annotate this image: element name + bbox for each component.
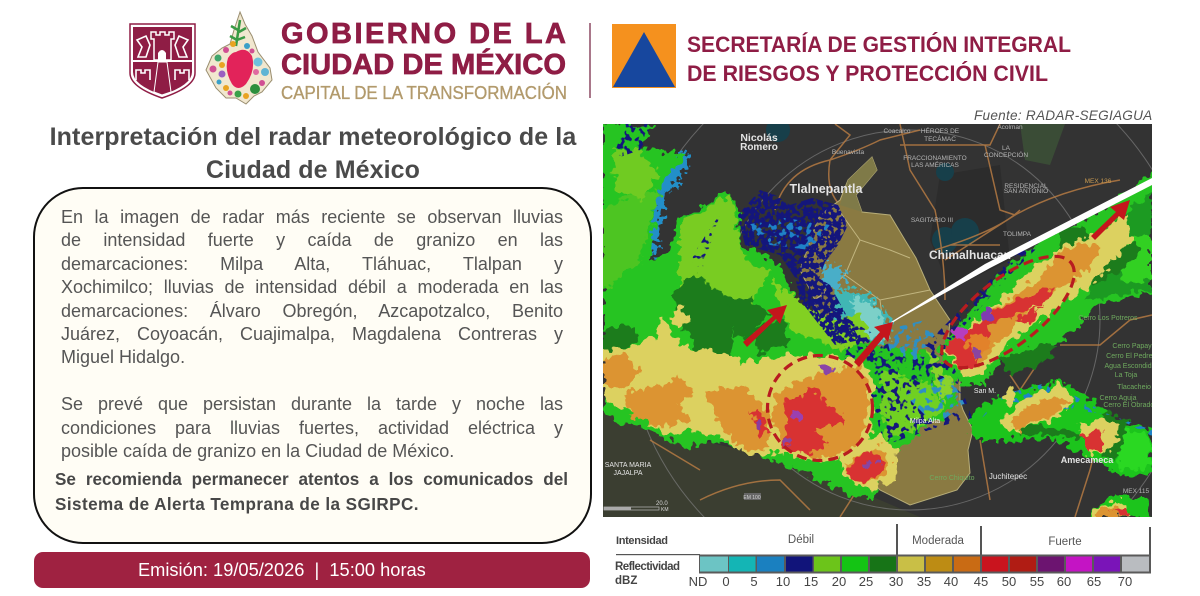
legend reflectivity title: Reflectividad <box>615 561 680 573</box>
legend dBZ values: ND <box>689 574 707 589</box>
legend intensity header: Intensidad <box>616 535 668 547</box>
radar echoes: speckled rain over the city <box>612 124 1152 445</box>
icon: Mexico City map with heart <box>206 12 272 104</box>
map place labels: Juchitepec <box>989 472 1027 481</box>
text block: forecast: Se prevé que persistan durante la tarde y noche las <box>61 394 563 414</box>
map place labels: JAJALPA <box>613 470 643 477</box>
legend dBZ values: 5 <box>750 574 758 589</box>
map place labels: Amecameca <box>1061 455 1114 465</box>
map minor labels: HÉROES DE <box>921 126 960 135</box>
legend reflectivity title: dBZ <box>615 575 637 587</box>
map place labels: Romero <box>740 142 778 153</box>
heading: Secretaría de Gestión Integral: SECRETARÍA DE GESTIÓN INTEGRAL <box>687 32 1071 57</box>
mountain labels: Cerro Aguja <box>1100 395 1137 402</box>
map minor labels: RESIDENCIAL <box>1004 183 1048 190</box>
heading: Gobierno de la Ciudad de México <box>281 18 566 81</box>
map minor labels: SAN ANTONIO <box>1004 188 1048 195</box>
mountain labels: Cerro Chiquito <box>929 475 975 482</box>
map minor labels: Coacalco <box>883 128 911 135</box>
legend dBZ values: 30 <box>889 574 903 589</box>
text block: current observations: demarcaciones: Álvaro Obregón, Azcapotzalco, Benito <box>61 301 563 321</box>
legend dBZ values: 60 <box>1057 574 1071 589</box>
header: government and civil protection logos <box>129 10 1071 105</box>
text block: current observations: Xochimilco; lluvias de intensidad débil a moderada en las <box>61 277 563 297</box>
map minor labels <box>832 124 1150 495</box>
mountain labels: Tlacacheio <box>1117 384 1151 391</box>
map minor labels: Milpa Alta <box>910 418 940 425</box>
text block: forecast: condiciones para lluvias fuertes, actividad eléctrica y <box>61 418 563 438</box>
emission date bar <box>34 552 590 588</box>
dashed ellipse: east storm <box>940 254 1076 370</box>
text block: recommendation: Sistema de Alerta Temprana de la SGIRPC. <box>55 495 419 514</box>
legend dBZ values: 35 <box>917 574 931 589</box>
map base <box>603 124 1152 517</box>
legend dBZ values: 10 <box>776 574 790 589</box>
legend reflectivity title <box>615 561 680 587</box>
mountain labels: Agua Escondida <box>1105 363 1156 370</box>
text block: recommendation: Se recomienda permanecer atentos a los comunicados del <box>55 470 568 489</box>
legend dBZ values: 70 <box>1118 574 1132 589</box>
legend intensity header <box>616 534 1082 548</box>
mountain labels: Cerro El Obrador <box>1103 402 1157 409</box>
dashed circle: southwest storm <box>768 356 872 460</box>
legend dBZ values: 65 <box>1087 574 1101 589</box>
text block: current observations <box>61 207 563 367</box>
CDMX northern olive tip <box>840 157 877 212</box>
heading: Secretaría de Gestión Integral <box>687 32 1071 86</box>
map place labels: Nicolás <box>740 132 778 144</box>
text block: current observations: Juárez, Coyoacán, Cuajimalpa, Magdalena Contreras y <box>61 324 563 344</box>
heading: Gobierno de la Ciudad de México: CIUDAD DE MÉXICO <box>281 47 566 81</box>
map minor labels: LAS AMÉRICAS <box>911 160 960 169</box>
road network <box>650 124 1152 517</box>
arrow: center storm motion <box>854 322 893 367</box>
text block: current observations: Miguel Hidalgo. <box>61 347 185 367</box>
arrow: west storm motion <box>743 305 787 347</box>
text block: current observations: En la imagen de radar más reciente se observan lluvias <box>61 207 563 227</box>
map scale bar: 20.0 <box>656 501 668 507</box>
radar echoes: heavy rain core <box>752 288 1132 517</box>
radar echoes: moderate rain <box>603 215 1132 517</box>
title <box>50 123 576 184</box>
map scale bar: EM 100 <box>743 495 761 501</box>
source note: Fuente: RADAR-SEGIAGUA <box>974 108 1152 123</box>
heading: Gobierno de la Ciudad de México: GOBIERNO DE LA <box>281 18 566 50</box>
radar echoes: speckled navy rain <box>738 190 860 345</box>
text block: recommendation <box>55 470 568 514</box>
map minor labels: CONCEPCIÓN <box>984 150 1028 159</box>
legend dividers <box>616 524 1151 555</box>
map minor labels: LA <box>1002 145 1011 152</box>
legend intensity header: Moderada <box>912 535 964 547</box>
arrow: northeast storm motion <box>1091 200 1130 240</box>
map scale bar <box>604 493 761 513</box>
text block: current observations: demarcaciones: Milpa Alta, Tláhuac, Tlalpan y <box>61 254 563 274</box>
map minor labels: MEX 115 <box>1123 488 1150 495</box>
legend dBZ values <box>689 574 1132 589</box>
map minor labels: MEX 136 <box>1085 178 1112 185</box>
radar echoes: dark green patches <box>603 225 1140 462</box>
map minor labels: TECÁMAC <box>924 134 956 143</box>
mountain labels: Cerro Papayo <box>1112 343 1156 350</box>
legend dBZ values: 0 <box>722 574 730 589</box>
radar map <box>603 124 1152 517</box>
map place labels: SANTA MARIA <box>605 462 652 469</box>
map minor labels: FRACCIONAMIENTO <box>903 155 967 162</box>
emission date bar: Emisión: 19/05/2026 | 15:00 horas <box>138 559 426 580</box>
map place labels: Chimalhuacan <box>929 248 1011 262</box>
legend colour scale <box>699 554 1151 574</box>
legend intensity header: Fuerte <box>1048 536 1082 548</box>
white radar beam line <box>891 178 1152 323</box>
mountain labels <box>929 315 1162 482</box>
icon: city shield <box>130 24 195 98</box>
legend dBZ values: 20 <box>832 574 846 589</box>
text block: current observations: de intensidad fuerte y caída de granizo en las <box>61 230 563 250</box>
legend dBZ values: 55 <box>1030 574 1044 589</box>
mountain labels: La Toja <box>1115 372 1137 379</box>
legend intensity header: Débil <box>788 534 814 546</box>
legend dBZ values: 15 <box>804 574 818 589</box>
title: Ciudad de México <box>206 156 420 184</box>
radar echoes: light rain edge <box>642 152 890 345</box>
legend dBZ values: 40 <box>944 574 958 589</box>
legend dBZ values: 25 <box>859 574 873 589</box>
radar echoes: green rain <box>603 124 1152 517</box>
mountain labels: Cerro Los Potreros <box>1078 315 1138 322</box>
map minor labels: Acolman <box>997 124 1023 131</box>
CDMX boundary area <box>800 156 972 506</box>
legend dBZ values: 50 <box>1002 574 1016 589</box>
heading: Secretaría de Gestión Integral: DE RIESGOS Y PROTECCIÓN CIVIL <box>687 61 1048 86</box>
panel: forecast text <box>33 187 592 544</box>
map place labels: Tlalnepantla <box>790 182 864 196</box>
map minor labels: TOLIMPA <box>1003 231 1032 238</box>
map scale bar: KM <box>661 507 668 513</box>
CDMX internal roads <box>815 205 930 340</box>
title: Interpretación del radar meteorológico de la <box>50 123 576 151</box>
mountain labels: Cerro El Pedregal <box>1106 353 1162 360</box>
tagline: Capital de la transformación: CAPITAL DE LA TRANSFORMACIÓN <box>281 82 567 103</box>
map minor labels: SAGITARIO III <box>911 217 953 224</box>
text block: forecast <box>61 394 563 461</box>
legend dBZ values: 45 <box>974 574 988 589</box>
map place labels <box>605 132 1114 481</box>
text block: forecast: posible caída de granizo en la Ciudad de México. <box>61 441 454 461</box>
icon: civil protection orange square and blue triangle <box>612 24 676 88</box>
map minor labels: San M. <box>974 388 996 395</box>
map minor labels: Buenavista <box>832 149 864 156</box>
